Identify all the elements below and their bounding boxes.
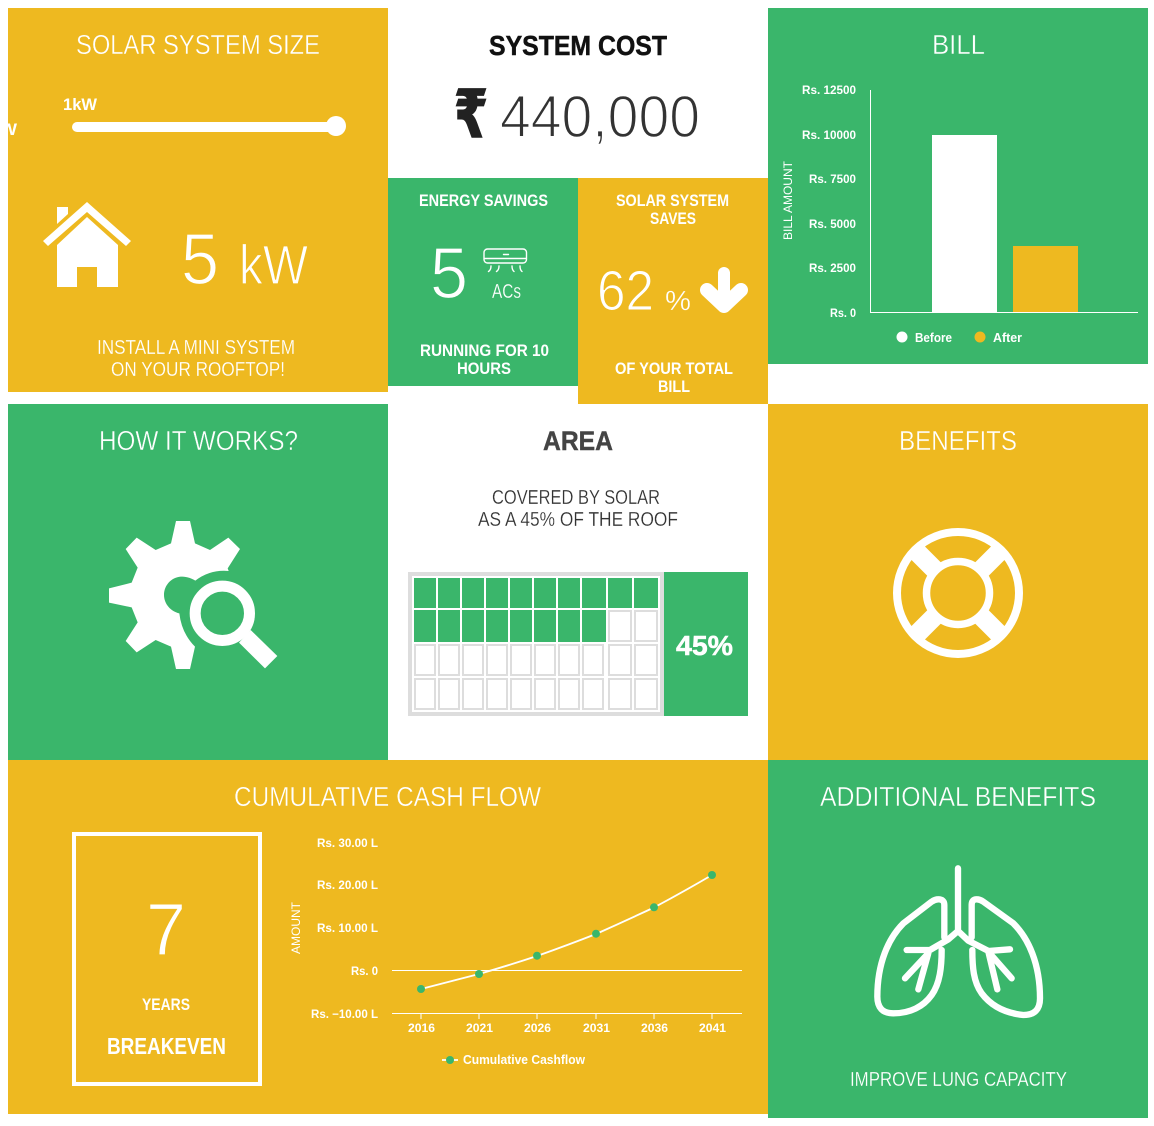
- value: 5 kW: kW: [239, 233, 308, 296]
- bar: after: [1013, 246, 1078, 312]
- heading: area: AREA: [543, 426, 613, 456]
- panel: solar system size: [0, 8, 388, 392]
- x-axis labels: [408, 1023, 727, 1035]
- panel: energy savings: [388, 178, 578, 386]
- legend: After: [993, 331, 1022, 345]
- text: covered by solar: COVERED BY SOLAR: [492, 487, 660, 509]
- legend: [896, 331, 1022, 345]
- legend: Before: [915, 331, 952, 345]
- icon: lifebuoy: [897, 532, 1019, 654]
- y-axis labels: Rs. 5000: [809, 219, 856, 231]
- text: running for 10 hours: [420, 341, 549, 378]
- icon: down arrow: [707, 273, 741, 306]
- y-axis labels: Rs. 12500: [802, 85, 856, 97]
- heading: benefits: BENEFITS: [899, 425, 1017, 456]
- heading: solar system saves: SAVES: [650, 209, 696, 228]
- panel: solar system saves: [578, 178, 768, 404]
- y-axis labels: Rs. 0: [351, 966, 378, 978]
- label: breakeven: BREAKEVEN: [107, 1033, 226, 1059]
- text: improve lung capacity: IMPROVE LUNG CAPACITY: [850, 1069, 1067, 1091]
- clipped slider label: W: [0, 120, 18, 139]
- label: ACs: ACs: [492, 281, 521, 303]
- percent sign: %: [665, 285, 691, 316]
- text: of your total bill: OF YOUR TOTAL: [615, 359, 733, 378]
- text: install a mini system: [97, 336, 295, 381]
- bar: before: [932, 135, 997, 312]
- y-axis labels: Rs. −10.00 L: [311, 1009, 378, 1021]
- panel: system cost: [454, 30, 700, 153]
- value: 62: 62: [597, 259, 654, 323]
- callout: 45%: [664, 572, 748, 716]
- y-axis labels: Rs. 10.00 L: [317, 923, 378, 935]
- y-axis labels: Rs. 0: [830, 308, 856, 320]
- heading: solar system saves: SOLAR SYSTEM: [616, 191, 729, 210]
- x-axis labels: 2036: [641, 1023, 668, 1035]
- heading: additional benefits: ADDITIONAL BENEFITS: [820, 781, 1096, 812]
- panel: how it works: [8, 404, 388, 760]
- heading: how it works: HOW IT WORKS?: [99, 425, 298, 456]
- panel: benefits: [768, 404, 1148, 760]
- rupee symbol: ₹: [454, 76, 488, 153]
- x-axis labels: 2016: [408, 1023, 435, 1035]
- line chart: cumulative cashflow: [289, 838, 742, 1067]
- icon: lungs: [877, 868, 1040, 1015]
- data line: [421, 875, 712, 989]
- label: years: YEARS: [142, 995, 190, 1014]
- heading: solar system saves: [616, 191, 729, 228]
- heading: system cost: SYSTEM COST: [489, 30, 667, 61]
- breakeven box: [74, 834, 260, 1084]
- icon: house: [43, 202, 131, 287]
- value: 440,000: 440,000: [500, 84, 700, 150]
- y-axis title: AMOUNT: [289, 901, 303, 954]
- icon: gear with magnifier: [109, 521, 277, 669]
- bar chart: bill: [781, 85, 1138, 345]
- x-axis labels: 2031: [583, 1023, 611, 1035]
- value: 5 kW: 5: [181, 220, 219, 300]
- slider: [72, 116, 346, 136]
- panel: area: [410, 426, 748, 716]
- text: install a mini system: ON YOUR ROOFTOP!: [111, 358, 285, 381]
- panel: cumulative cash flow: [8, 760, 768, 1114]
- text: running for 10 hours: RUNNING FOR 10: [420, 341, 549, 360]
- value: 5 kW: [181, 220, 308, 300]
- legend: Cumulative Cashflow: [463, 1053, 585, 1067]
- x-axis labels: 2021: [466, 1023, 494, 1035]
- text: of your total bill: BILL: [658, 377, 690, 396]
- y-axis title: BILL AMOUNT: [781, 160, 795, 240]
- y-axis labels: Rs. 30.00 L: [317, 838, 378, 850]
- panel: bill: [768, 8, 1148, 364]
- text: install a mini system: INSTALL A MINI SYSTEM: [97, 336, 295, 359]
- x-axis labels: 2041: [699, 1023, 727, 1035]
- y-axis labels: Rs. 7500: [809, 174, 856, 186]
- y-axis labels: Rs. 20.00 L: [317, 880, 378, 892]
- text: running for 10 hours: HOURS: [457, 359, 511, 378]
- slider label: 1kW: 1kW: [63, 95, 98, 114]
- y-axis labels: Rs. 2500: [809, 263, 856, 275]
- panel: additional benefits: [768, 760, 1148, 1118]
- data points: [417, 871, 716, 993]
- text: of your total bill: [615, 359, 733, 396]
- value: 7: 7: [146, 888, 186, 971]
- value: 5: 5: [430, 234, 468, 314]
- text: covered by solar: [478, 487, 678, 531]
- x-axis labels: 2026: [524, 1023, 551, 1035]
- text: covered by solar: AS A 45% OF THE ROOF: [478, 509, 678, 531]
- roof grid: [410, 574, 662, 714]
- y-axis labels: [802, 85, 856, 320]
- heading: cumulative cash flow: CUMULATIVE CASH FLOW: [234, 781, 541, 812]
- heading: solar system size: SOLAR SYSTEM SIZE: [76, 29, 320, 60]
- y-axis labels: [311, 838, 378, 1021]
- heading: bill: BILL: [932, 29, 985, 60]
- y-axis labels: Rs. 10000: [802, 130, 856, 142]
- callout: 45%: 45%: [676, 630, 733, 661]
- heading: energy savings: ENERGY SAVINGS: [419, 191, 548, 210]
- icon: air conditioner: [484, 249, 526, 272]
